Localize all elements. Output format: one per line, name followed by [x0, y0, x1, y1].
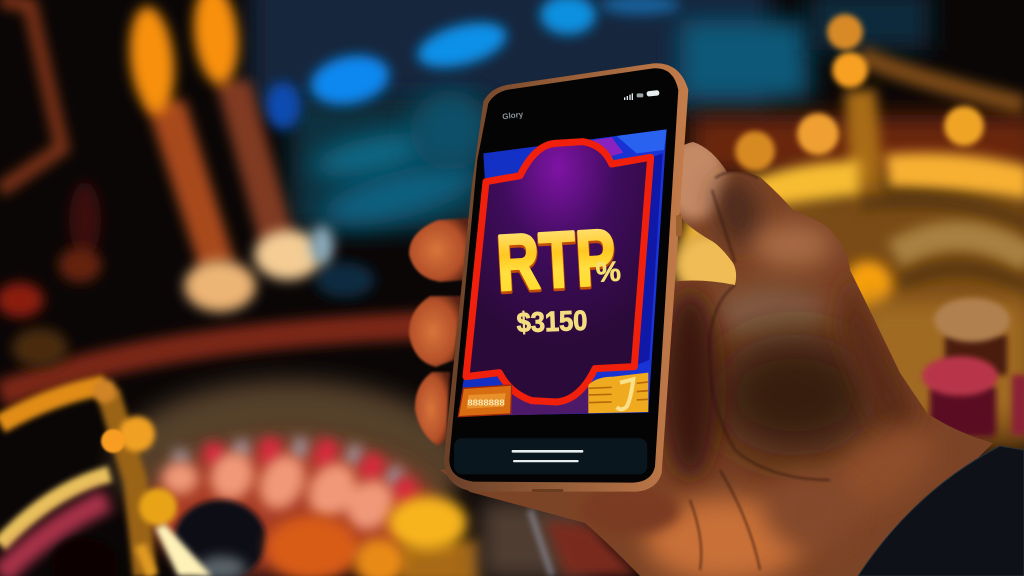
hand [409, 130, 1024, 576]
behind phone shade [662, 290, 718, 480]
game panel [466, 142, 651, 402]
gold coin stack icon [588, 373, 648, 413]
table edge band [0, 325, 440, 395]
phone body [444, 63, 688, 492]
ticket icon: 8888888 [467, 397, 505, 407]
sleeve [858, 446, 1024, 576]
RTP heading: RTP [494, 214, 618, 309]
RTP heading: RTP [494, 212, 618, 307]
small wheel and arc left [0, 474, 119, 576]
bottom port [532, 489, 563, 492]
orange light columns [0, 0, 334, 368]
middle finger [409, 296, 462, 367]
screen light blue accent [617, 129, 667, 153]
home indicator [512, 450, 583, 462]
side button [676, 215, 682, 237]
wrist highlight [830, 422, 932, 507]
blue lights [265, 0, 680, 298]
palm near phone [580, 486, 680, 534]
outer edge shade [840, 270, 920, 430]
casino chips right [922, 298, 1024, 437]
screen right dark edge [637, 153, 663, 365]
ticket icon [458, 385, 512, 417]
ring finger [415, 372, 450, 446]
phone front [449, 68, 678, 483]
screen background [458, 129, 667, 416]
creases [690, 172, 830, 570]
home bar area [454, 438, 647, 474]
mound shadow [710, 333, 880, 457]
percent sign: % [595, 256, 622, 288]
index finger [409, 218, 470, 282]
roulette wheel right [673, 152, 1024, 450]
roulette wheel left [115, 380, 640, 576]
lower palm highlight [645, 498, 805, 576]
thumb base highlight [752, 223, 832, 267]
screen purple top accent [593, 137, 623, 157]
palm and thumb [430, 130, 1024, 576]
thumb tip [680, 142, 732, 226]
bottom strip [512, 388, 590, 415]
phone [444, 63, 688, 492]
golden post left [0, 379, 212, 576]
golden bokeh and rail [735, 14, 1024, 290]
prize amount: $3150 [516, 305, 588, 338]
thumb knuckle [707, 172, 769, 252]
upper mound [717, 289, 827, 341]
status icons [624, 90, 660, 100]
status carrier: Glory [502, 110, 524, 121]
